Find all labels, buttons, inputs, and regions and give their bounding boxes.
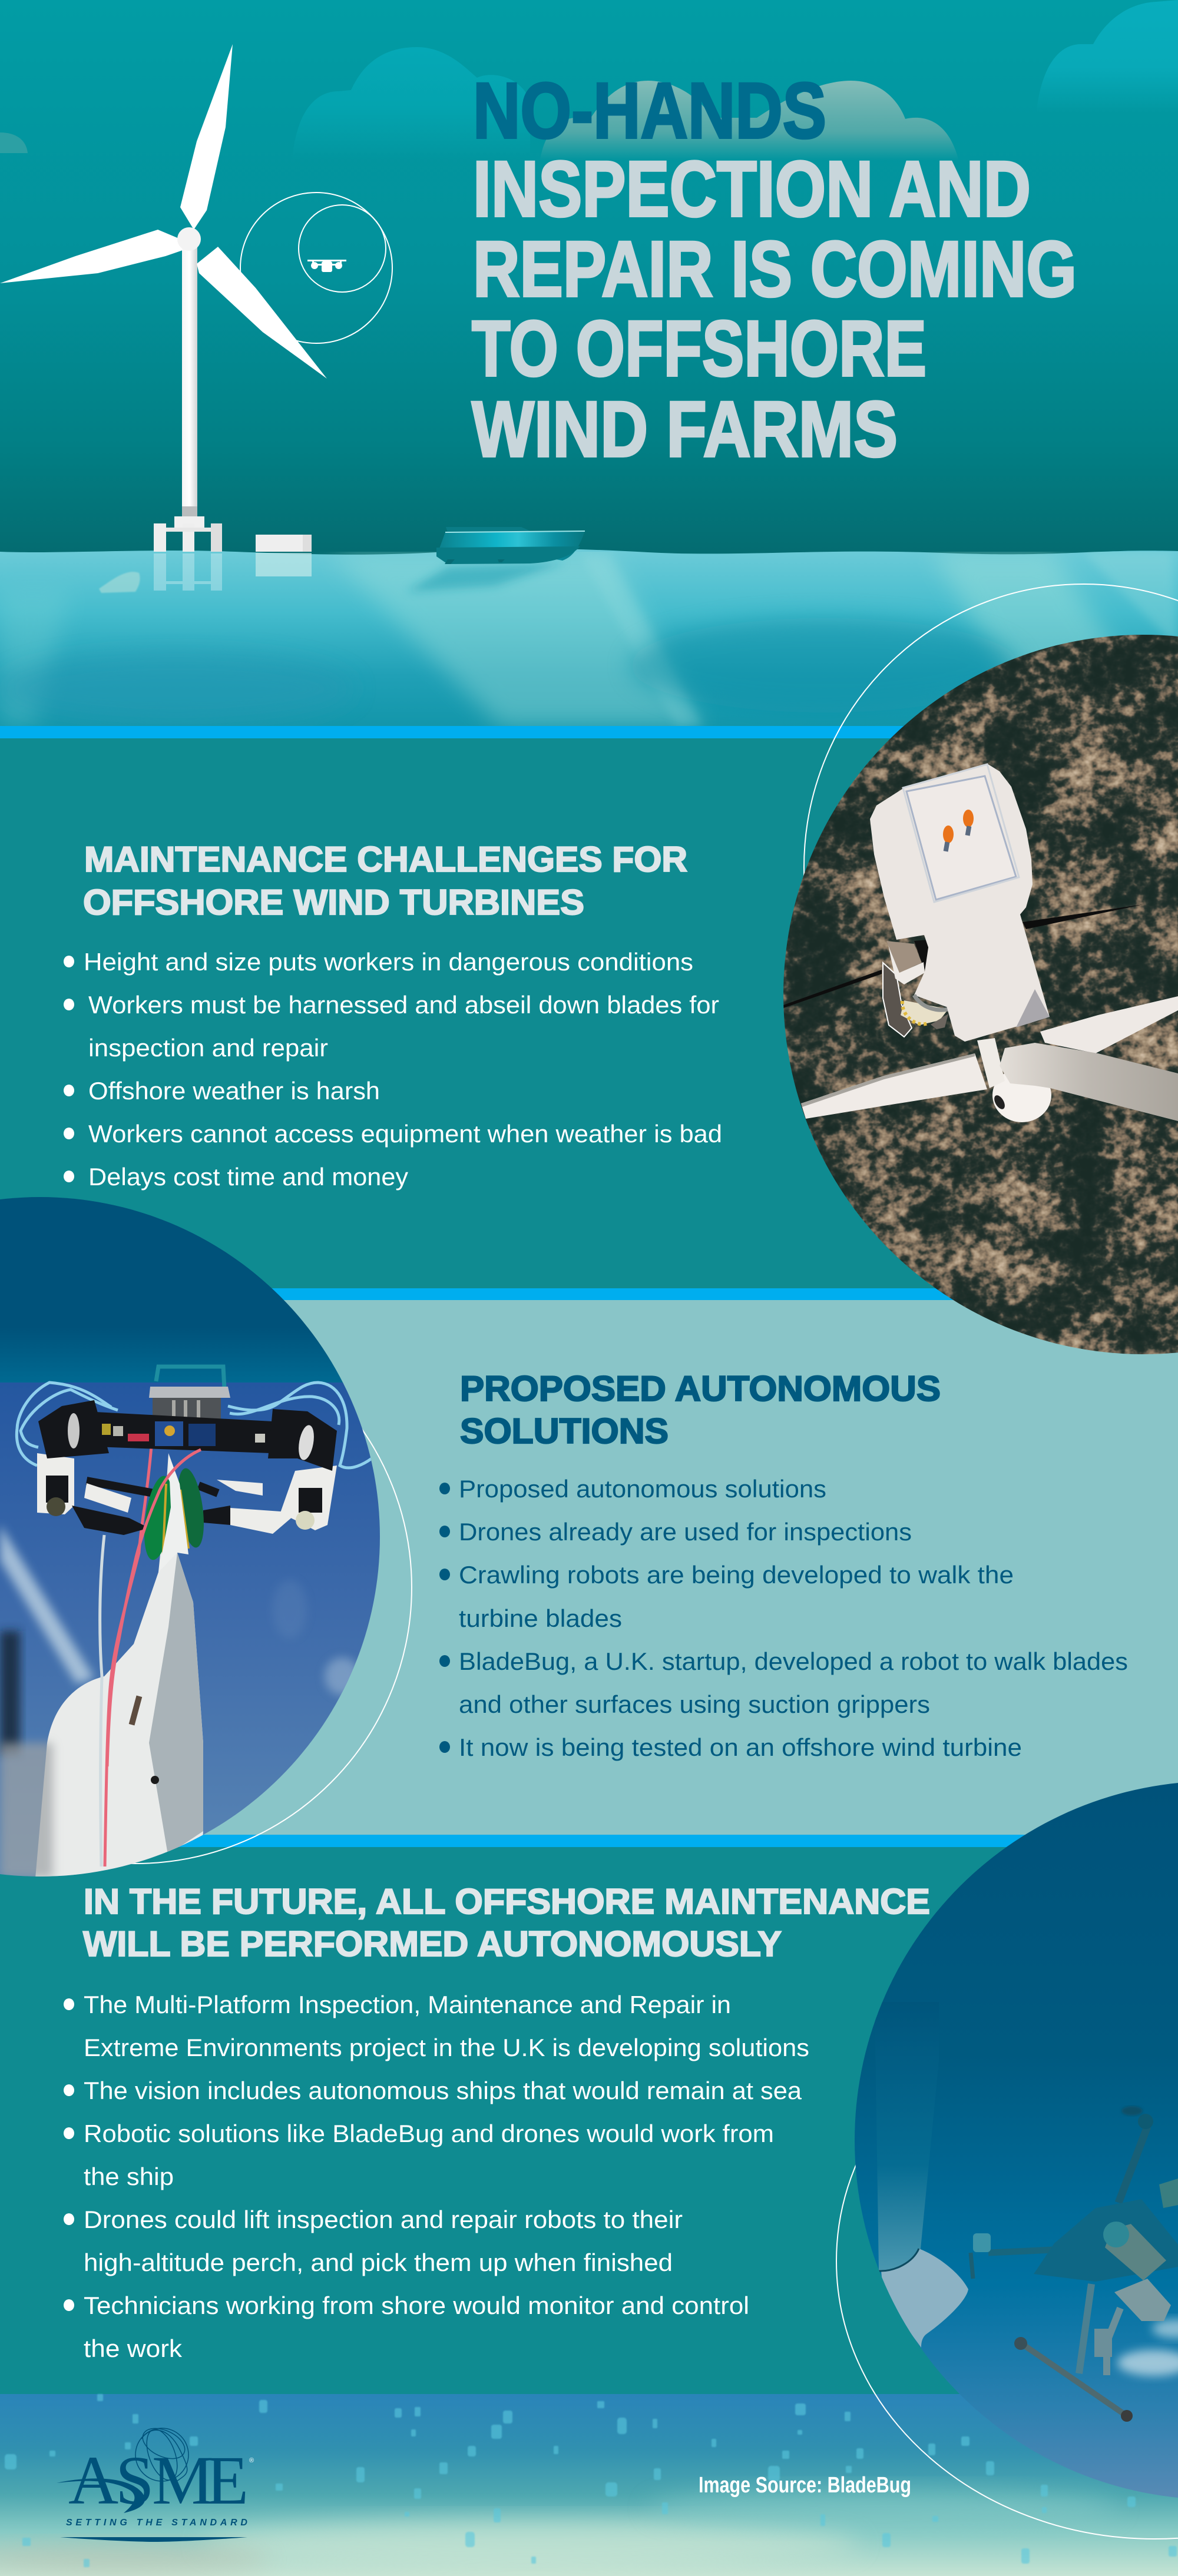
bullet text: Height and size puts workers in dangerous conditions bbox=[84, 948, 693, 976]
photo circle: BladeBug robot bbox=[0, 1195, 389, 1878]
logo: ASME: ® bbox=[249, 2457, 254, 2464]
bullet text: Crawling robots are being developed to walk the bbox=[459, 1561, 1014, 1589]
heading bbox=[460, 1369, 941, 1451]
robot bbox=[16, 1367, 372, 1572]
title: WIND FARMS bbox=[472, 386, 898, 473]
bullet text: and other surfaces using suction grippers bbox=[459, 1690, 930, 1718]
icon: drone in circles bbox=[240, 193, 392, 343]
light rays in water bbox=[0, 552, 1178, 726]
bullet text: Robotic solutions like BladeBug and drones would work from bbox=[84, 2120, 774, 2147]
panel: proposed solutions background bbox=[0, 1300, 1178, 1835]
bullet text bbox=[84, 1991, 809, 2362]
clouds in drone photo bbox=[1117, 2319, 1178, 2376]
circuit boards bbox=[102, 1421, 265, 1446]
bullet text: Drones already are used for inspections bbox=[459, 1518, 912, 1546]
heading: IN THE FUTURE, ALL OFFSHORE MAINTENANCE bbox=[84, 1882, 930, 1921]
title: TO OFFSHORE bbox=[472, 305, 926, 393]
icon: submerged rock bbox=[99, 572, 140, 593]
bullet markers bbox=[439, 1483, 450, 1753]
icon: boat bbox=[406, 527, 585, 592]
logo: ASME: SETTING THE STANDARD bbox=[66, 2518, 247, 2528]
icon: wind turbine bbox=[0, 44, 327, 591]
bullet text bbox=[84, 948, 722, 1191]
arms bbox=[46, 1476, 68, 1503]
clouds bbox=[0, 0, 1178, 177]
cables bbox=[16, 1383, 372, 1468]
heading bbox=[83, 840, 687, 922]
bullet text: The Multi-Platform Inspection, Maintenance and Repair in bbox=[84, 1991, 731, 2018]
outline circle: challenges bbox=[804, 584, 1178, 1151]
heading: WILL BE PERFORMED AUTONOMOUSLY bbox=[83, 1924, 782, 1964]
bullet markers bbox=[64, 956, 74, 1182]
heading: MAINTENANCE CHALLENGES FOR bbox=[84, 840, 687, 879]
frame bbox=[38, 1400, 109, 1458]
bullet text: The vision includes autonomous ships that would remain at sea bbox=[84, 2077, 802, 2104]
section: maintenance challenges bbox=[64, 840, 722, 1191]
turbine blade bbox=[0, 1446, 203, 1878]
ocean water bbox=[0, 549, 1178, 730]
carry handle bbox=[156, 1367, 224, 1389]
turbine blade shadows bbox=[783, 904, 1143, 1008]
divider bars bbox=[0, 726, 1178, 1847]
bullet text: inspection and repair bbox=[88, 1034, 328, 1062]
section: future maintenance bbox=[64, 1882, 930, 2362]
platform deck and tower bbox=[882, 940, 948, 1037]
bubbles bbox=[5, 2394, 1177, 2567]
title: NO-HANDS bbox=[473, 67, 826, 155]
panel: sea floor footer bbox=[0, 2394, 1178, 2576]
white plates bbox=[37, 1453, 74, 1514]
logo: ASME bbox=[57, 2422, 254, 2542]
bullet text bbox=[459, 1475, 1128, 1761]
photo circle: nacelle from above bbox=[783, 635, 1178, 1354]
bullet text: Offshore weather is harsh bbox=[88, 1077, 380, 1105]
panel: future maintenance background bbox=[0, 1847, 1178, 2394]
sky streak bbox=[0, 1525, 94, 1684]
title bbox=[472, 67, 1077, 473]
workers bbox=[943, 810, 974, 852]
outline circle: future bbox=[836, 1983, 1178, 2539]
bullet text: turbine blades bbox=[459, 1604, 622, 1632]
bullet markers bbox=[64, 1998, 74, 2311]
bullet text: Workers must be harnessed and abseil down blades for bbox=[88, 991, 719, 1019]
bullet text: Delays cost time and money bbox=[88, 1163, 408, 1191]
bullet text: Technicians working from shore would monitor and control bbox=[84, 2292, 749, 2319]
heading: OFFSHORE WIND TURBINES bbox=[83, 883, 584, 922]
drone bbox=[971, 2106, 1178, 2422]
gripper discs bbox=[140, 1474, 177, 1561]
blades bbox=[801, 996, 1178, 1122]
logo: ASME: ASME bbox=[68, 2442, 249, 2519]
image source credit: Image Source: BladeBug bbox=[699, 2473, 911, 2498]
helipad rail bbox=[903, 764, 1019, 902]
panel: maintenance challenges background bbox=[0, 738, 1178, 1288]
panel: hero sky bbox=[0, 0, 1178, 556]
heading: SOLUTIONS bbox=[460, 1411, 669, 1451]
globe bbox=[135, 2422, 190, 2484]
tower and nacelle bbox=[875, 2002, 968, 2348]
photo circle: inspection drone bbox=[848, 1778, 1178, 2502]
bullet text: It now is being tested on an offshore wind turbine bbox=[459, 1733, 1022, 1761]
bullet text: Workers cannot access equipment when weather is bad bbox=[88, 1120, 722, 1148]
outline circle: solutions bbox=[0, 1311, 412, 1864]
heading: PROPOSED AUTONOMOUS bbox=[460, 1369, 941, 1408]
nacelle bbox=[870, 764, 1050, 1042]
bullet text: Proposed autonomous solutions bbox=[459, 1475, 826, 1503]
bullet text: Drones could lift inspection and repair robots to their bbox=[84, 2206, 683, 2233]
heading bbox=[83, 1882, 930, 1964]
bullet text: the work bbox=[84, 2335, 183, 2362]
title: INSPECTION AND bbox=[473, 145, 1031, 233]
icon: platform box bbox=[256, 535, 312, 576]
bullet text: the ship bbox=[84, 2163, 174, 2190]
bullet text: Extreme Environments project in the U.K is developing solutions bbox=[84, 2034, 809, 2061]
section: proposed solutions bbox=[439, 1369, 1128, 1761]
bullet text: BladeBug, a U.K. startup, developed a robot to walk blades bbox=[459, 1647, 1128, 1675]
bullet text: high-altitude perch, and pick them up when finished bbox=[84, 2249, 673, 2276]
